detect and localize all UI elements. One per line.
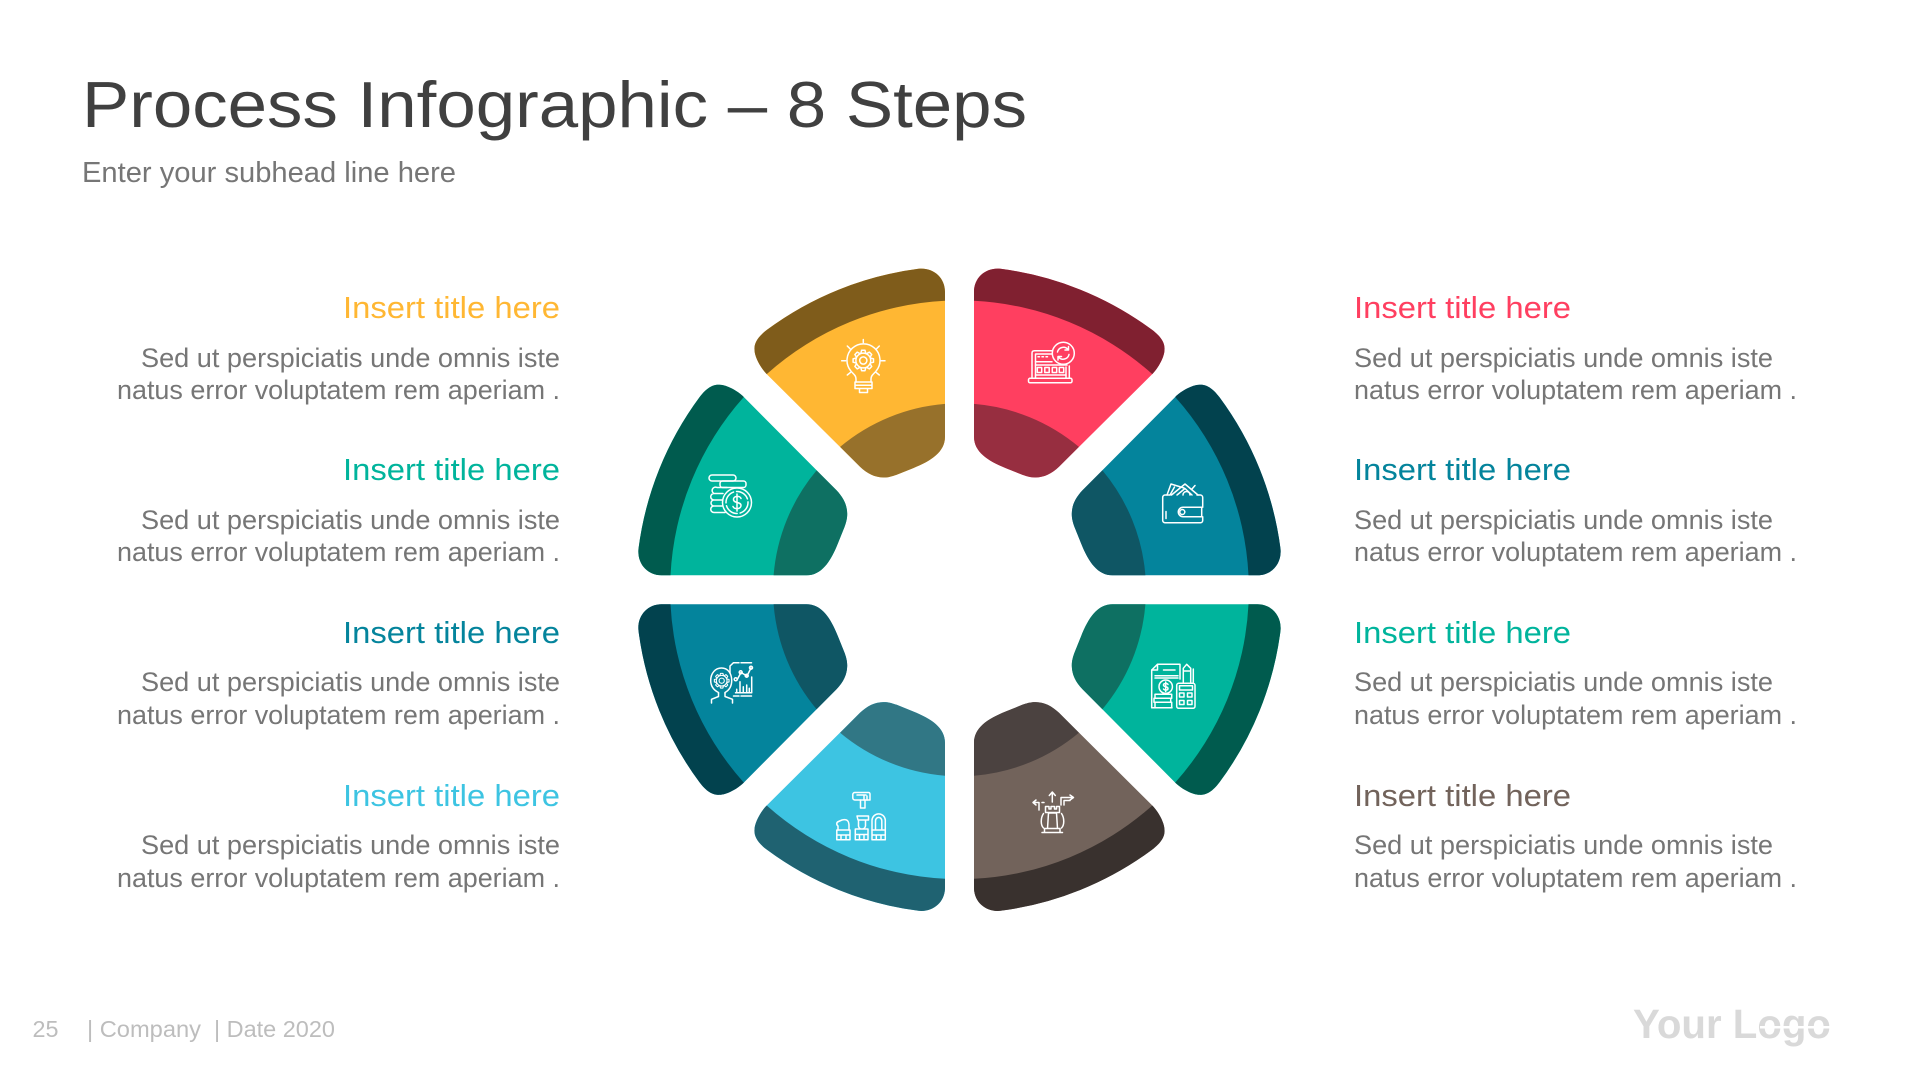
body text xyxy=(117,343,560,405)
icon: wallet xyxy=(1163,484,1203,523)
blue wedge xyxy=(638,604,847,795)
heading: Insert title here xyxy=(1354,778,1571,813)
heading: Insert title here xyxy=(343,290,560,325)
body text: Sed ut perspiciatis unde omnis iste xyxy=(141,830,560,860)
logo placeholder: Your Logo xyxy=(1633,1001,1831,1047)
segment: yellow, upper left xyxy=(754,269,945,478)
left text block 3 xyxy=(117,615,560,730)
icon: document, coins and calculator xyxy=(1152,664,1195,708)
heading: Insert title here xyxy=(343,452,560,487)
footer: page number: 25 xyxy=(32,1016,58,1042)
icon: chess rook with arrows xyxy=(1033,792,1074,832)
left text block 4 xyxy=(117,778,560,893)
right text block 2 xyxy=(1354,452,1797,567)
footer: company: | Company xyxy=(87,1016,201,1042)
teal wedge xyxy=(1072,604,1281,795)
body text xyxy=(1354,343,1797,405)
body text: Sed ut perspiciatis unde omnis iste xyxy=(141,343,560,373)
brown wedge xyxy=(974,702,1165,911)
left text block 1 xyxy=(117,290,560,405)
body text: natus error voluptatem rem aperiam . xyxy=(1354,375,1797,405)
heading: Insert title here xyxy=(1354,290,1571,325)
icon: coins xyxy=(709,475,752,517)
subtitle: Enter your subhead line here xyxy=(82,157,456,189)
segment: blue, left lower xyxy=(638,604,847,795)
segment: teal, left upper xyxy=(638,385,847,575)
body text: Sed ut perspiciatis unde omnis iste xyxy=(141,667,560,697)
body text xyxy=(117,667,560,730)
yellow wedge xyxy=(754,269,945,478)
body text: natus error voluptatem rem aperiam . xyxy=(1354,537,1797,567)
heading: Insert title here xyxy=(1354,452,1571,487)
heading: Insert title here xyxy=(1354,615,1571,650)
blue wedge xyxy=(1072,385,1281,575)
segment: teal, right lower xyxy=(1072,604,1281,795)
light blue wedge xyxy=(754,702,945,911)
left text block 2 xyxy=(117,452,560,567)
teal wedge xyxy=(638,385,847,575)
segment: light blue, lower left xyxy=(754,702,945,911)
right text block 3 xyxy=(1354,615,1797,730)
segment: brown, lower right xyxy=(974,702,1165,911)
body text: natus error voluptatem rem aperiam . xyxy=(117,375,560,405)
body text: natus error voluptatem rem aperiam . xyxy=(1354,700,1797,730)
body text: Sed ut perspiciatis unde omnis iste xyxy=(1354,505,1773,535)
body text xyxy=(1354,830,1797,893)
footer: date: | Date 2020 xyxy=(214,1016,335,1042)
segment: blue, right upper xyxy=(1072,385,1281,575)
body text: natus error voluptatem rem aperiam . xyxy=(1354,863,1797,893)
body text: Sed ut perspiciatis unde omnis iste xyxy=(141,505,560,535)
heading: Insert title here xyxy=(343,615,560,650)
body text xyxy=(1354,667,1797,730)
body text: natus error voluptatem rem aperiam . xyxy=(117,863,560,893)
heading: Insert title here xyxy=(343,778,560,813)
icon: laptop with refresh xyxy=(1028,342,1074,383)
body text xyxy=(117,830,560,893)
icon: paint roller and three people xyxy=(837,792,885,840)
body text: Sed ut perspiciatis unde omnis iste xyxy=(1354,830,1773,860)
icon: head with gear and chart xyxy=(711,663,752,703)
body text xyxy=(1354,505,1797,567)
right text block 1 xyxy=(1354,290,1797,405)
segment: red, upper right xyxy=(974,269,1165,478)
body text: Sed ut perspiciatis unde omnis iste xyxy=(1354,667,1773,697)
title: Process Infographic – 8 Steps xyxy=(82,68,1027,141)
icon: light bulb with gear xyxy=(842,340,885,392)
red wedge xyxy=(974,269,1165,478)
body text: natus error voluptatem rem aperiam . xyxy=(117,700,560,730)
body text: Sed ut perspiciatis unde omnis iste xyxy=(1354,343,1773,373)
body text: natus error voluptatem rem aperiam . xyxy=(117,537,560,567)
body text xyxy=(117,505,560,567)
right text block 4 xyxy=(1354,778,1797,893)
